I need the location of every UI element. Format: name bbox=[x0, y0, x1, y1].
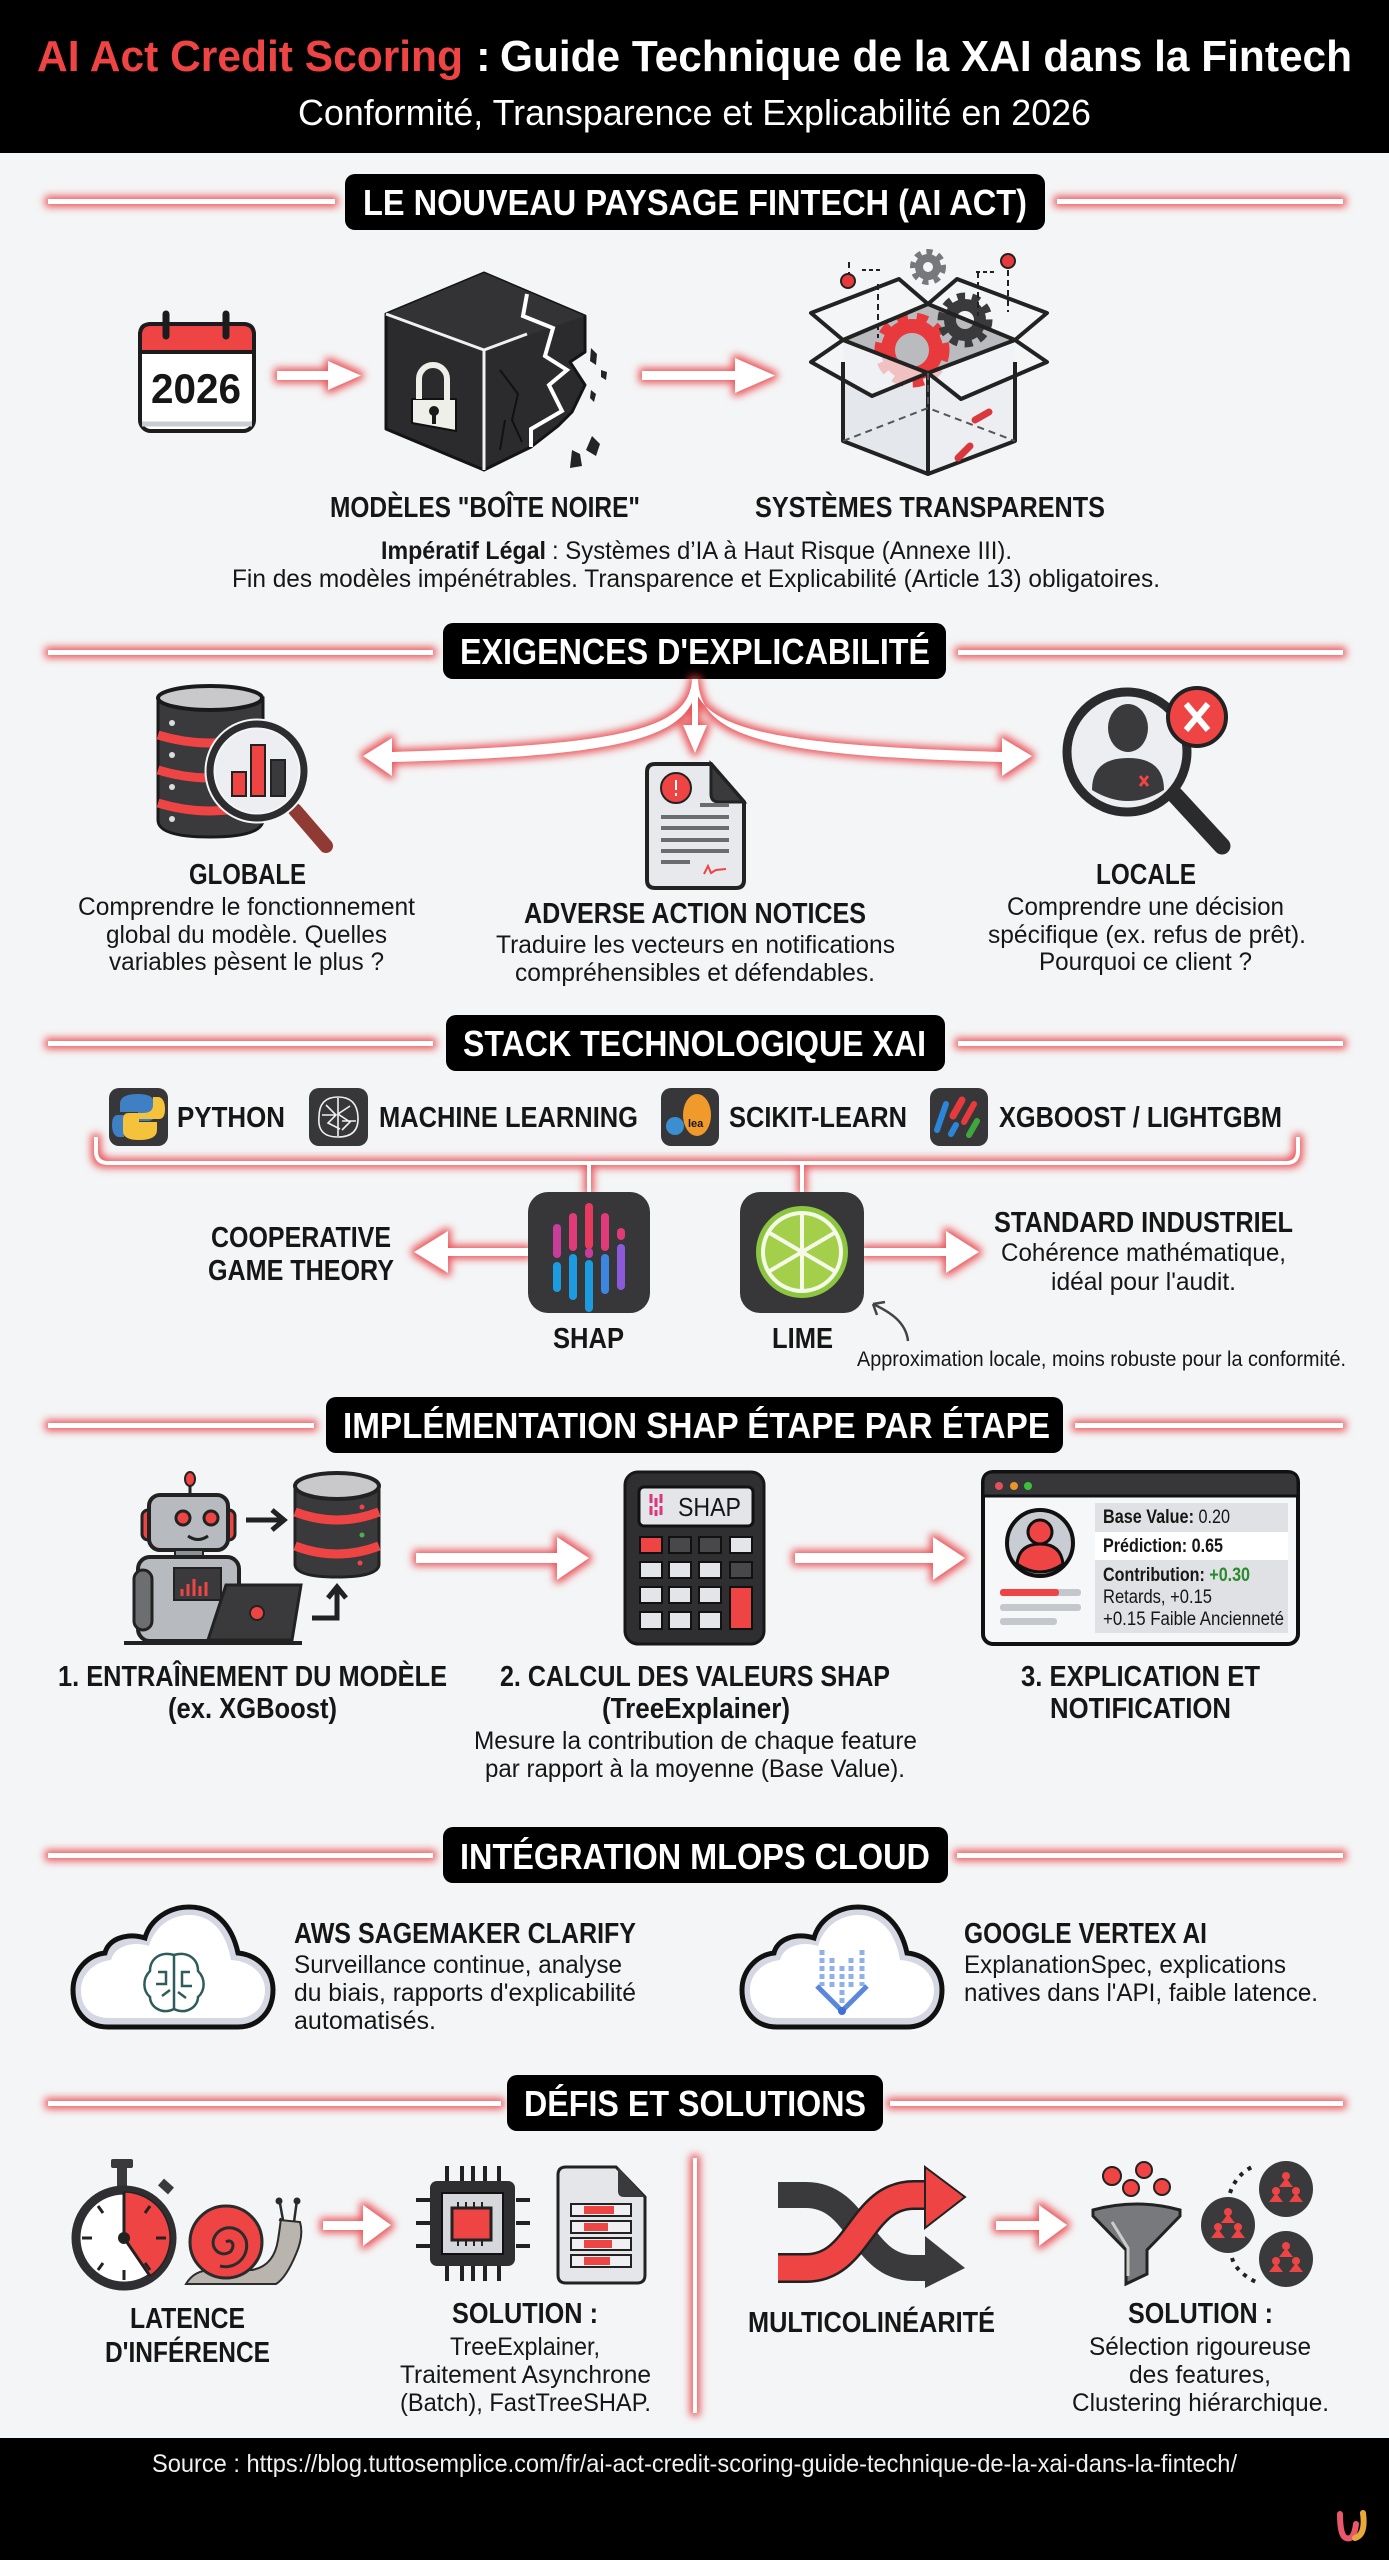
text block: step 2: 2. CALCUL DES VALEURS SHAP bbox=[500, 1661, 890, 1693]
text block: step 2: par rapport à la moyenne (Base Value). bbox=[485, 1755, 905, 1783]
text block: globale bbox=[78, 859, 415, 976]
label: systemes transparents: SYSTÈMES TRANSPARENTS bbox=[755, 490, 1105, 524]
text block: globale: Comprendre le fonctionnement bbox=[78, 893, 415, 921]
text block: adverse action notices: Traduire les vecteurs en notifications bbox=[496, 931, 895, 959]
header band bbox=[0, 0, 1389, 153]
icon: cracked black box bbox=[386, 273, 607, 470]
arrow: step 1 to step 2 bbox=[416, 1537, 589, 1580]
label: scikit-learn: SCIKIT-LEARN bbox=[729, 1102, 907, 1134]
text block: standard industriel: idéal pour l'audit. bbox=[1051, 1268, 1236, 1296]
text block: locale: Pourquoi ce client ? bbox=[1039, 948, 1252, 976]
text block: adverse action notices bbox=[496, 898, 895, 987]
text block: imperatif legal: : Systèmes d’IA à Haut Risque (Annexe III). bbox=[552, 537, 1012, 565]
label: cooperative game theory bbox=[208, 1222, 394, 1287]
arrow: multicollinearity to solution bbox=[996, 2205, 1067, 2246]
label: python: PYTHON bbox=[177, 1102, 285, 1134]
icon: aws cloud bbox=[73, 1907, 273, 2027]
arrow: step 2 to step 3 bbox=[795, 1537, 965, 1580]
text block: solution multicolinearite: Sélection rigoureuse bbox=[1089, 2333, 1311, 2361]
panel: explanation window: +0.15 Faible Ancienneté bbox=[1103, 1609, 1284, 1630]
icon: shuffle arrows bbox=[778, 2167, 965, 2288]
text block: solution latence bbox=[400, 2298, 651, 2417]
icon: calendar 2026: 2026 bbox=[151, 365, 241, 412]
text block: step 1: 1. ENTRAÎNEMENT DU MODÈLE bbox=[58, 1659, 447, 1693]
text block: standard industriel: STANDARD INDUSTRIEL bbox=[994, 1207, 1293, 1239]
icon: snail bbox=[186, 2198, 301, 2284]
text block: solution latence: (Batch), FastTreeSHAP. bbox=[400, 2389, 651, 2417]
section heading: mlops: INTÉGRATION MLOPS CLOUD bbox=[460, 1836, 930, 1877]
icon: batch document bbox=[558, 2167, 645, 2283]
text block: aws sagemaker clarify: du biais, rapports d'explicabilité bbox=[294, 1979, 636, 2007]
arrows: three-way split bbox=[363, 679, 1032, 776]
footer band bbox=[0, 2438, 1389, 2560]
text block: latence: LATENCE bbox=[130, 2303, 245, 2335]
section heading: stack bbox=[48, 1015, 1343, 1071]
text block: locale: Comprendre une décision bbox=[1007, 893, 1284, 921]
icon: funnel with dots bbox=[1093, 2162, 1180, 2284]
text block: step 2: Mesure la contribution de chaque feature bbox=[474, 1727, 917, 1755]
text block: imperatif legal: Fin des modèles impénétrables. Transparence et Explicabilité (Article 13) obligatoires. bbox=[232, 565, 1160, 593]
text block: google vertex ai: natives dans l'API, faible latence. bbox=[964, 1979, 1318, 2007]
text block: step 2 bbox=[474, 1661, 917, 1783]
icon: xgboost bbox=[930, 1088, 988, 1146]
section heading: le nouveau paysage bbox=[48, 174, 1343, 230]
label: cooperative game theory: GAME THEORY bbox=[208, 1255, 394, 1287]
text block: locale bbox=[988, 859, 1306, 976]
arrow: latency to solution bbox=[323, 2205, 391, 2246]
label: multicolinearite: MULTICOLINÉARITÉ bbox=[748, 2305, 995, 2339]
text block: solution multicolinearite: SOLUTION : bbox=[1128, 2298, 1273, 2330]
text block: locale: LOCALE bbox=[1096, 859, 1196, 891]
section heading: mlops bbox=[48, 1827, 1343, 1883]
title: AI Act Credit Scoring bbox=[37, 32, 463, 81]
text block: latence bbox=[105, 2303, 270, 2369]
section heading: defis: DÉFIS ET SOLUTIONS bbox=[524, 2083, 866, 2124]
title bbox=[37, 32, 1352, 81]
section heading: stack: STACK TECHNOLOGIQUE XAI bbox=[463, 1023, 926, 1064]
icon: notice document bbox=[647, 764, 744, 888]
label: shap: SHAP bbox=[553, 1323, 624, 1355]
text block: aws sagemaker clarify: Surveillance continue, analyse bbox=[294, 1951, 622, 1979]
section heading: exigences bbox=[48, 623, 1343, 679]
text block: solution multicolinearite: Clustering hiérarchique. bbox=[1072, 2389, 1329, 2417]
text block: solution latence: Traitement Asynchrone bbox=[400, 2361, 651, 2389]
text block: google vertex ai: GOOGLE VERTEX AI bbox=[964, 1918, 1207, 1950]
icon: transparent open box with gears bbox=[811, 252, 1047, 474]
text block: adverse action notices: compréhensibles et défendables. bbox=[515, 959, 875, 987]
text block: standard industriel bbox=[994, 1207, 1293, 1296]
text block: imperatif legal bbox=[232, 537, 1160, 593]
text block: step 3 bbox=[1021, 1661, 1260, 1725]
icon: lime logo bbox=[740, 1192, 864, 1313]
icon: database with magnifier chart bbox=[158, 686, 326, 846]
text block: solution latence: SOLUTION : bbox=[452, 2298, 598, 2330]
icon: scikit-learn: lea bbox=[688, 1118, 704, 1130]
text block: step 3: 3. EXPLICATION ET bbox=[1021, 1661, 1260, 1693]
arrow: calendar to black box bbox=[277, 361, 361, 390]
icon: shap calculator: SHAP bbox=[678, 1492, 741, 1522]
source link: Source : https://blog.tuttosemplice.com/fr/ai-act-credit-scoring-guide-technique-de-la-xai-dans-la-fintech/ bbox=[152, 2450, 1237, 2478]
label: cooperative game theory: COOPERATIVE bbox=[211, 1222, 391, 1254]
icon: machine learning bbox=[309, 1088, 368, 1146]
label: xgboost lightgbm: XGBOOST / LIGHTGBM bbox=[999, 1102, 1282, 1134]
panel: explanation window: Base Value: 0.20 bbox=[1103, 1507, 1230, 1528]
text block: solution latence: TreeExplainer, bbox=[450, 2333, 600, 2361]
label: machine learning: MACHINE LEARNING bbox=[379, 1102, 638, 1134]
icon: magnifier on client with red cross bbox=[1067, 688, 1226, 846]
text block: step 2: (TreeExplainer) bbox=[602, 1693, 790, 1725]
section heading: defis bbox=[48, 2075, 1343, 2131]
text block: globale: global du modèle. Quelles bbox=[106, 921, 387, 949]
note: lime approximation: Approximation locale, moins robuste pour la conformité. bbox=[857, 1348, 1346, 1371]
text block: globale: GLOBALE bbox=[189, 859, 306, 891]
text block: step 1 bbox=[58, 1659, 447, 1725]
bracket connector bbox=[96, 1137, 1298, 1192]
arrow: shap to game theory bbox=[414, 1231, 528, 1273]
title: Guide Technique de la XAI dans la Fintech bbox=[500, 32, 1352, 81]
text block: standard industriel: Cohérence mathématique, bbox=[1001, 1239, 1286, 1267]
icon: robot with database bbox=[124, 1472, 379, 1643]
text block: step 3: NOTIFICATION bbox=[1050, 1693, 1231, 1725]
icon: logo bbox=[1340, 2513, 1364, 2538]
text block: google vertex ai: ExplanationSpec, explications bbox=[964, 1951, 1286, 1979]
text block: google vertex ai bbox=[964, 1918, 1318, 2007]
text block: imperatif legal: Impératif Légal bbox=[381, 537, 546, 565]
text block: step 1: (ex. XGBoost) bbox=[168, 1693, 337, 1725]
icon: shap logo bbox=[528, 1192, 650, 1313]
panel: explanation window: Prédiction: 0.65 bbox=[1103, 1536, 1223, 1557]
icon: feature clusters bbox=[1201, 2161, 1313, 2287]
panel: explanation window bbox=[983, 1472, 1298, 1644]
text block: aws sagemaker clarify bbox=[294, 1918, 636, 2035]
label: lime: LIME bbox=[772, 1323, 833, 1355]
subtitle: Conformité, Transparence et Explicabilité en 2026 bbox=[298, 92, 1091, 133]
text block: latence: D'INFÉRENCE bbox=[105, 2335, 270, 2369]
title: : bbox=[476, 32, 491, 81]
section heading: exigences: EXIGENCES D'EXPLICABILITÉ bbox=[460, 631, 930, 672]
text block: aws sagemaker clarify: AWS SAGEMAKER CLARIFY bbox=[294, 1918, 636, 1950]
label: modeles boite noire: MODÈLES "BOÎTE NOIRE" bbox=[330, 490, 640, 524]
text block: solution multicolinearite bbox=[1072, 2298, 1329, 2417]
icon: calendar 2026 bbox=[140, 314, 254, 431]
text block: aws sagemaker clarify: automatisés. bbox=[294, 2007, 436, 2035]
panel: explanation window: Contribution: +0.30 bbox=[1103, 1565, 1250, 1586]
arrow: small annotation arrow bbox=[873, 1302, 908, 1341]
section heading: implementation bbox=[48, 1397, 1343, 1453]
icon: stopwatch bbox=[76, 2159, 172, 2286]
section heading: implementation: IMPLÉMENTATION SHAP ÉTAPE PAR ÉTAPE bbox=[343, 1405, 1050, 1446]
icon: vertex cloud bbox=[742, 1907, 942, 2027]
text block: locale: spécifique (ex. refus de prêt). bbox=[988, 921, 1306, 949]
section heading: le nouveau paysage: LE NOUVEAU PAYSAGE FINTECH (AI ACT) bbox=[363, 182, 1027, 223]
icon: scikit-learn bbox=[661, 1088, 719, 1146]
arrow: black box to transparent box bbox=[642, 358, 775, 393]
arrow: lime to standard bbox=[864, 1231, 979, 1273]
icon: python bbox=[109, 1088, 168, 1146]
icon: processor chip bbox=[416, 2166, 530, 2281]
panel: explanation window: Retards, +0.15 bbox=[1103, 1587, 1212, 1608]
text block: globale: variables pèsent le plus ? bbox=[109, 948, 384, 976]
divider bbox=[693, 2158, 697, 2413]
text block: solution multicolinearite: des features, bbox=[1129, 2361, 1271, 2389]
icon: shap calculator bbox=[625, 1472, 764, 1644]
text block: adverse action notices: ADVERSE ACTION NOTICES bbox=[524, 898, 866, 930]
